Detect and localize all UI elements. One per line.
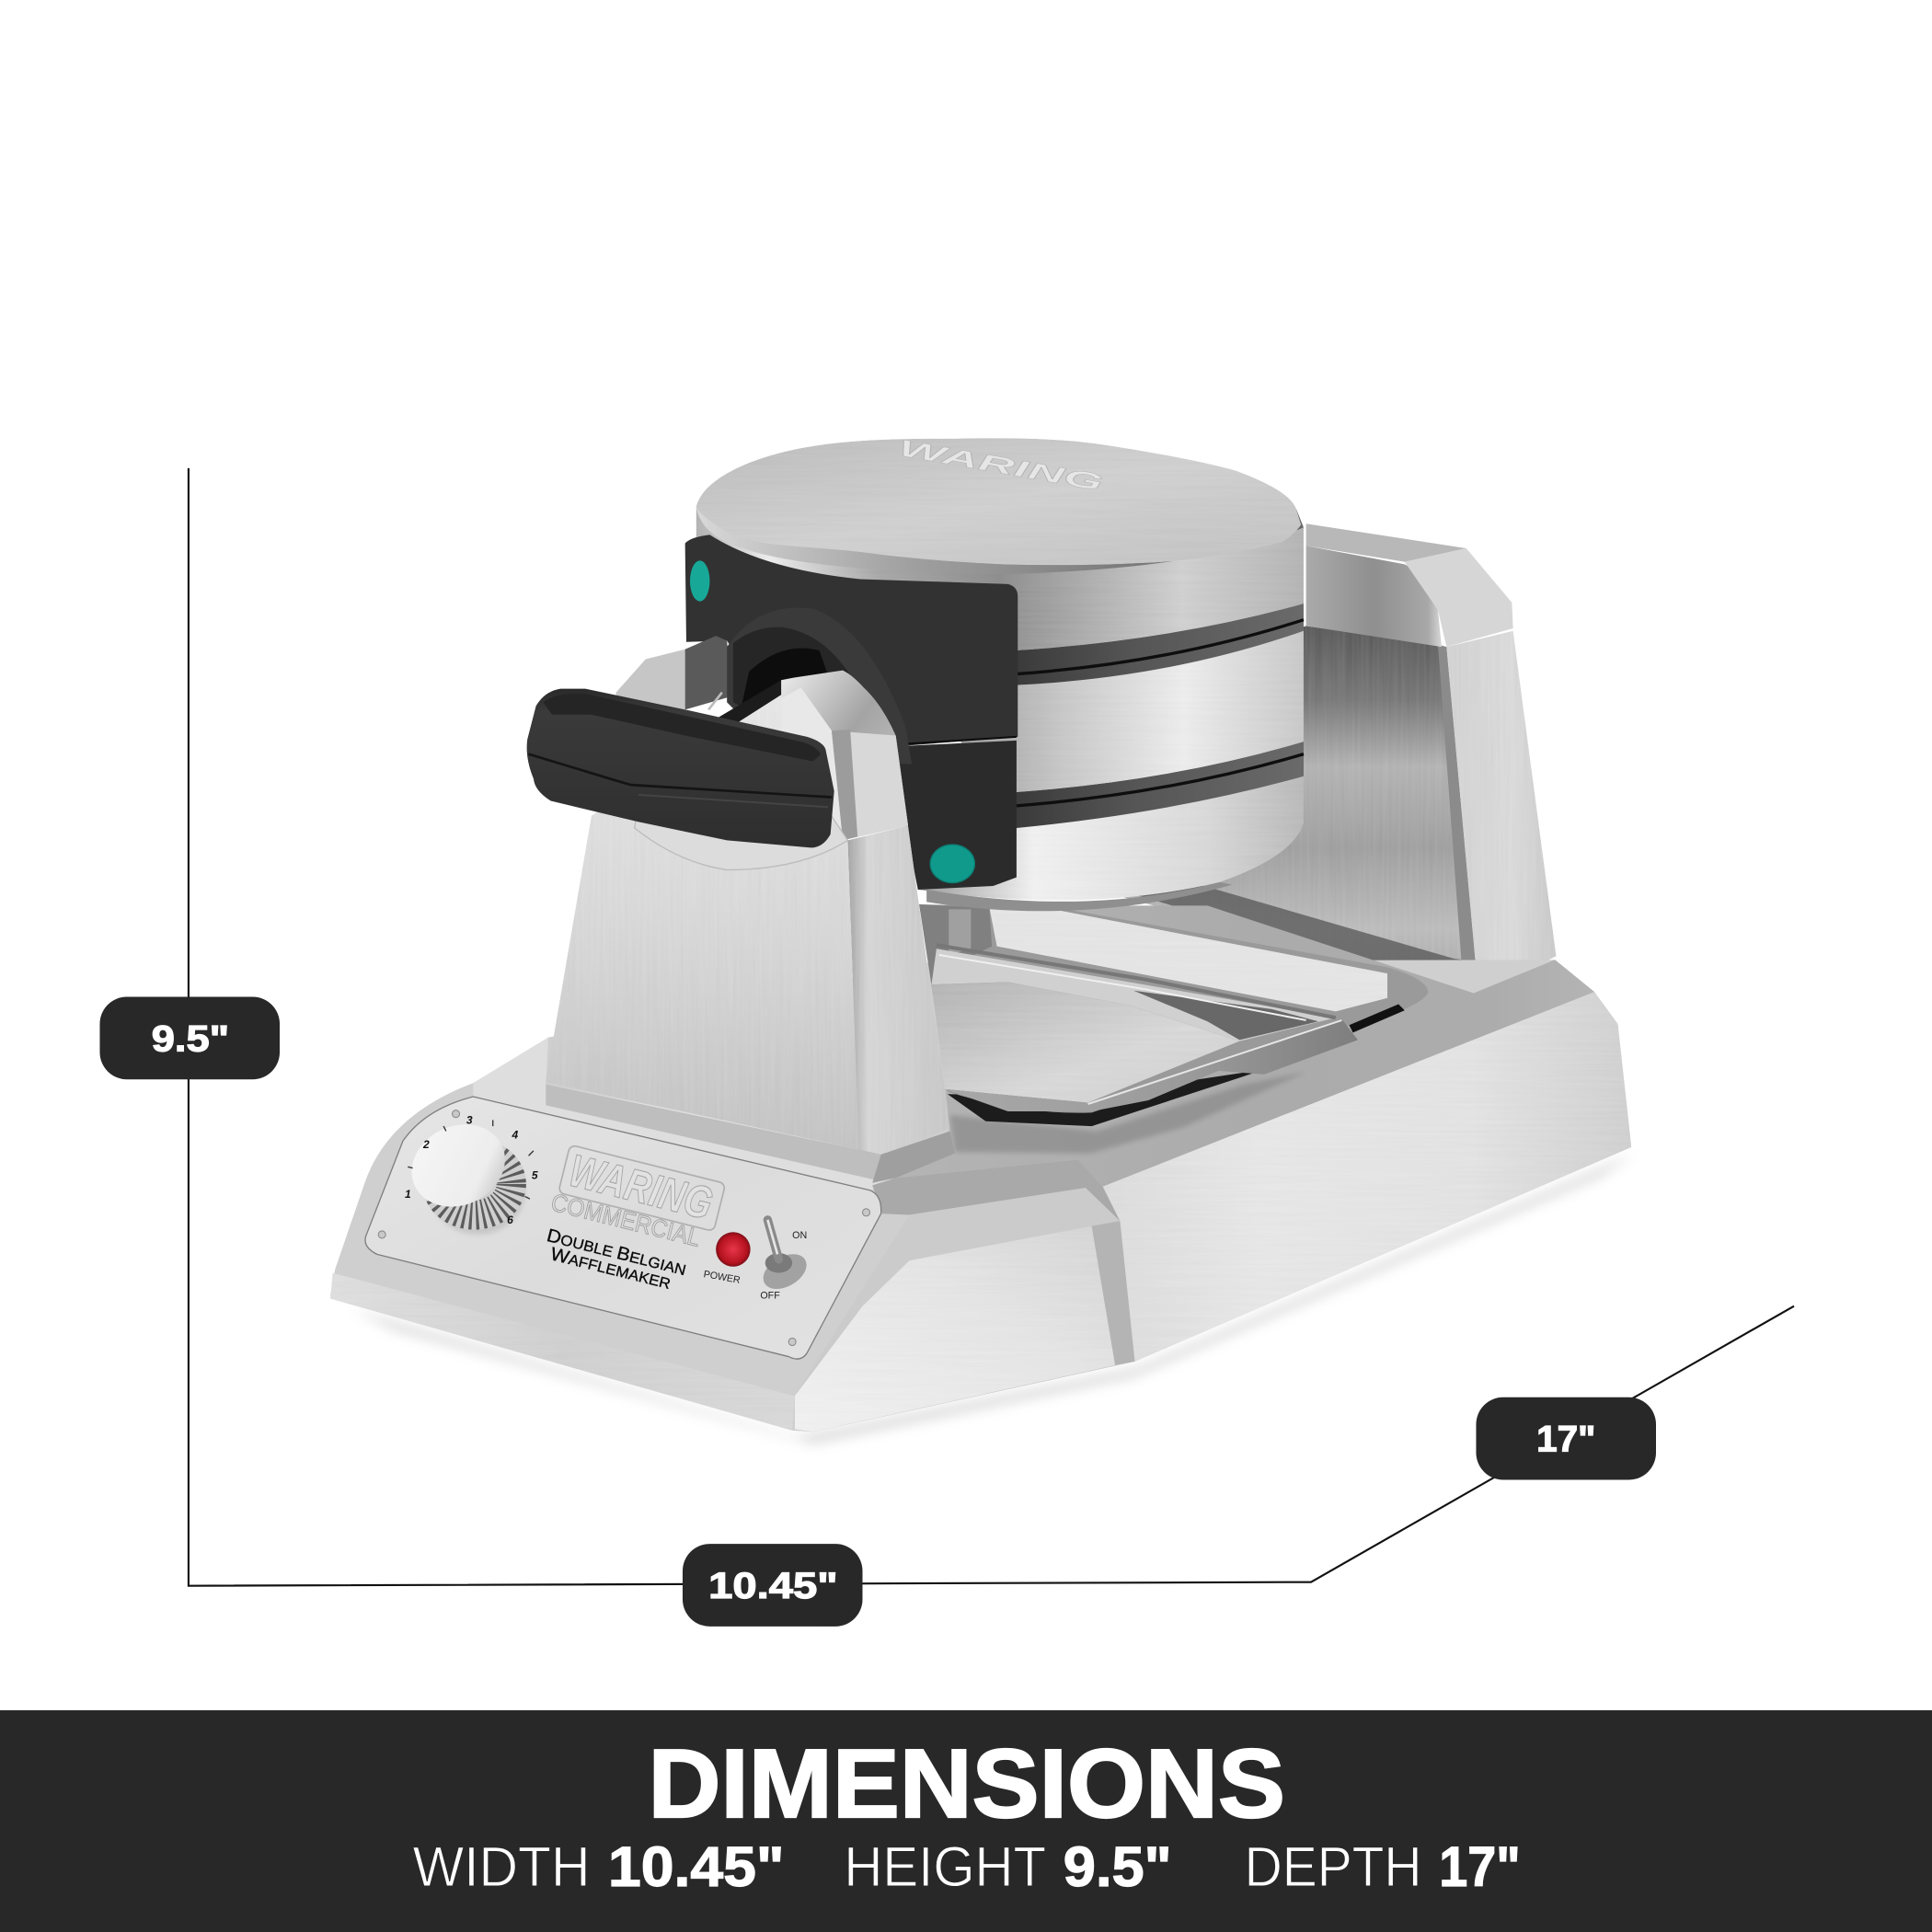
power light: POWER <box>703 1269 742 1286</box>
dial numbers: 5 <box>532 1169 538 1182</box>
plate screws <box>378 1110 870 1345</box>
dial numbers: 2 <box>422 1138 430 1151</box>
middle silver section <box>961 626 1304 792</box>
dimension summary: DEPTH <box>1245 1835 1422 1898</box>
WARING logo: COMMERCIAL <box>548 1189 703 1252</box>
hub recess <box>702 607 912 764</box>
WARING logo <box>548 1144 726 1252</box>
power light <box>703 1232 751 1286</box>
toggle switch: OFF <box>760 1291 780 1302</box>
height label: 9.5" <box>152 1018 229 1059</box>
front control plate <box>365 1097 881 1359</box>
lower black hinge block <box>890 741 1017 890</box>
dimension summary: 9.5" <box>1064 1835 1172 1898</box>
dimension summary: HEIGHT <box>844 1835 1046 1898</box>
base body <box>330 905 1631 1432</box>
base corner face <box>795 1188 1134 1432</box>
lid embossed logo: WARING <box>896 435 1105 497</box>
bottom band <box>0 1710 1932 1932</box>
drip tray <box>919 904 1428 1126</box>
waffle cylinder <box>696 435 1304 911</box>
width label <box>683 1544 863 1627</box>
base top surface <box>896 905 1594 1187</box>
shadow below tray <box>950 1072 1306 1154</box>
toggle switch <box>757 1220 812 1302</box>
hub disc <box>635 788 847 870</box>
dial ticks <box>408 1120 534 1199</box>
teal indicator lower <box>930 845 974 883</box>
teal indicator upper <box>690 560 709 602</box>
dimension summary: 17" <box>1439 1835 1521 1898</box>
shaded bevel <box>872 1159 1120 1221</box>
dimension summary: WIDTH <box>413 1835 591 1898</box>
base front lip <box>330 1272 795 1431</box>
temperature dial <box>398 1110 525 1235</box>
dimension summary <box>413 1835 1521 1898</box>
model name: DOUBLE BELGIAN <box>545 1225 688 1280</box>
dimension summary: 10.45" <box>608 1835 784 1898</box>
lid top <box>696 438 1301 565</box>
dial numbers: 6 <box>507 1213 513 1226</box>
toggle switch: ON <box>792 1230 807 1241</box>
bottom rim <box>926 882 1232 911</box>
depth label: 17" <box>1536 1419 1595 1460</box>
dial numbers <box>405 1113 538 1226</box>
dial numbers: 3 <box>466 1113 473 1126</box>
dimension lines <box>189 468 1794 1586</box>
WARING logo: WARING <box>564 1144 718 1229</box>
handle <box>527 689 834 847</box>
product: waffle maker <box>330 435 1634 1444</box>
model name: WAFFLEMAKER <box>548 1244 673 1294</box>
upper black hinge block <box>685 535 1018 747</box>
lower dark band <box>961 740 1304 828</box>
column foot plinth <box>872 1131 955 1183</box>
dial numbers: 1 <box>405 1188 411 1201</box>
base long side <box>1103 992 1631 1362</box>
lower silver section <box>918 766 1304 901</box>
base shadow <box>351 1154 1634 1444</box>
lid rim <box>696 493 1304 574</box>
dial numbers: 4 <box>511 1129 518 1142</box>
heading: DIMENSIONS <box>648 1730 1285 1838</box>
width label: 10.45" <box>708 1565 838 1606</box>
upper silver section <box>696 506 1304 650</box>
left hinge arm <box>616 636 732 709</box>
depth label <box>1476 1397 1656 1479</box>
front support column <box>546 671 950 1155</box>
upper dark band <box>961 602 1304 685</box>
block seam <box>901 737 1017 744</box>
back upright column <box>1109 523 1557 995</box>
height label <box>99 996 280 1079</box>
